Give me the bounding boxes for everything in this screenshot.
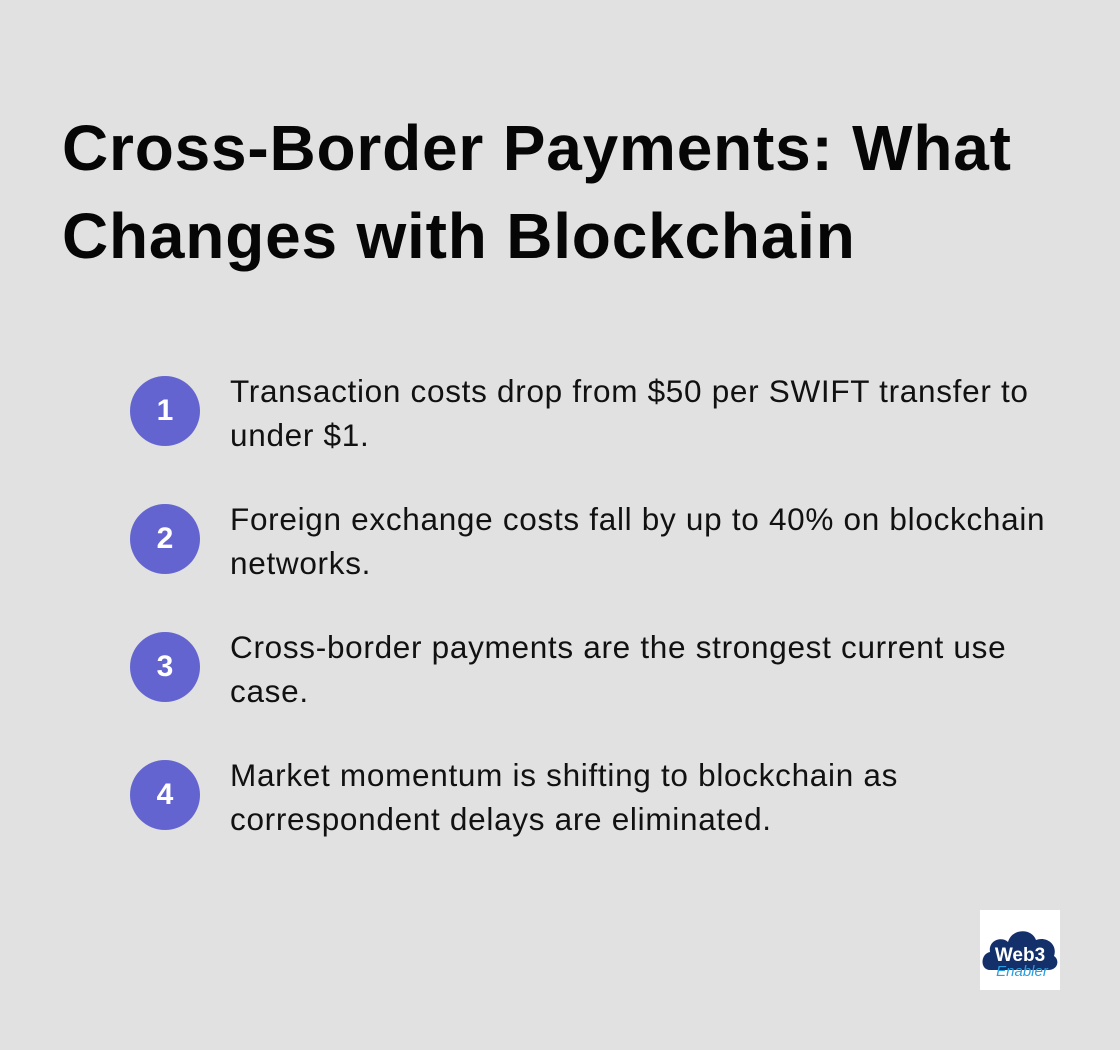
text 4 xyxy=(230,757,898,837)
number badge 4 xyxy=(130,760,200,830)
number badge 1 xyxy=(130,376,200,446)
number badge 2 xyxy=(130,504,200,574)
text 2 xyxy=(230,501,1045,581)
item 2 xyxy=(130,501,1045,581)
title xyxy=(62,112,1012,272)
logo: Web3 Enabler: Web3 xyxy=(995,945,1045,966)
item 3 xyxy=(130,629,1006,709)
text 3: Cross-border payments are the strongest current use xyxy=(230,629,1006,665)
text 4: correspondent delays are eliminated. xyxy=(230,801,772,837)
item 4 xyxy=(130,757,898,837)
text 2: Foreign exchange costs fall by up to 40% on blockchain xyxy=(230,501,1045,537)
text 1: under $1. xyxy=(230,417,369,453)
text 4: Market momentum is shifting to blockchain as xyxy=(230,757,898,793)
title: Changes with Blockchain xyxy=(62,200,856,272)
logo: Web3 Enabler xyxy=(980,910,1060,990)
number badge 4: 4 xyxy=(157,778,173,811)
logo: Web3 Enabler: Enabler xyxy=(996,963,1049,980)
number badge 1: 1 xyxy=(157,394,173,427)
title: Cross-Border Payments: What xyxy=(62,112,1012,184)
number badge 3 xyxy=(130,632,200,702)
number badge 2: 2 xyxy=(157,522,173,555)
text 1 xyxy=(230,373,1029,453)
text 2: networks. xyxy=(230,545,371,581)
text 1: Transaction costs drop from $50 per SWIFT transfer to xyxy=(230,373,1029,409)
item 1 xyxy=(130,373,1029,453)
text 3: case. xyxy=(230,673,309,709)
text 3 xyxy=(230,629,1006,709)
number badge 3: 3 xyxy=(157,650,173,683)
